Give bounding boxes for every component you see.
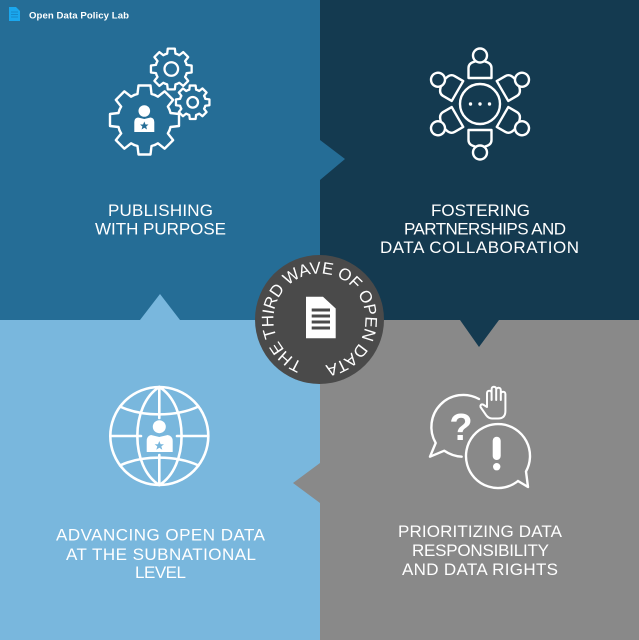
icon: globe with person [110, 387, 208, 485]
heading: prioritizing data responsibility: RESPONSIBILITY [412, 541, 549, 560]
panel: publishing with purpose [0, 0, 345, 320]
icon: speech bubbles and raised hand [430, 387, 530, 488]
heading: fostering partnerships: PARTNERSHIPS AND [404, 220, 566, 238]
panel: fostering partnerships [320, 0, 639, 347]
heading: fostering partnerships: DATA COLLABORATION [380, 238, 579, 257]
heading: prioritizing data responsibility [398, 522, 563, 579]
panel: prioritizing data responsibility [293, 320, 639, 640]
heading: advancing open data: AT THE SUBNATIONAL [66, 545, 256, 564]
logo: Open Data Policy Lab [29, 10, 129, 22]
heading: prioritizing data responsibility: PRIORITIZING DATA [398, 522, 563, 541]
icon: document [306, 297, 336, 338]
heading: publishing with purpose [95, 201, 226, 238]
heading: advancing open data: LEVEL [135, 563, 186, 582]
heading: prioritizing data responsibility: AND DATA RIGHTS [402, 560, 558, 579]
logo [9, 7, 129, 22]
icon: speech bubbles and raised hand: ? [449, 407, 473, 449]
center badge: the third wave of open data: THE THIRD WAVE OF OPEN DATA [262, 262, 378, 376]
heading: advancing open data: ADVANCING OPEN DATA [56, 526, 266, 544]
icon: people around a table [426, 48, 534, 160]
panel: advancing open data [0, 294, 320, 640]
heading: publishing with purpose: WITH PURPOSE [95, 220, 226, 238]
heading: publishing with purpose: PUBLISHING [108, 201, 213, 220]
heading: fostering partnerships: FOSTERING [431, 201, 530, 220]
heading: fostering partnerships [380, 201, 579, 257]
icon: gears with person [110, 49, 209, 154]
heading: advancing open data [56, 526, 266, 582]
